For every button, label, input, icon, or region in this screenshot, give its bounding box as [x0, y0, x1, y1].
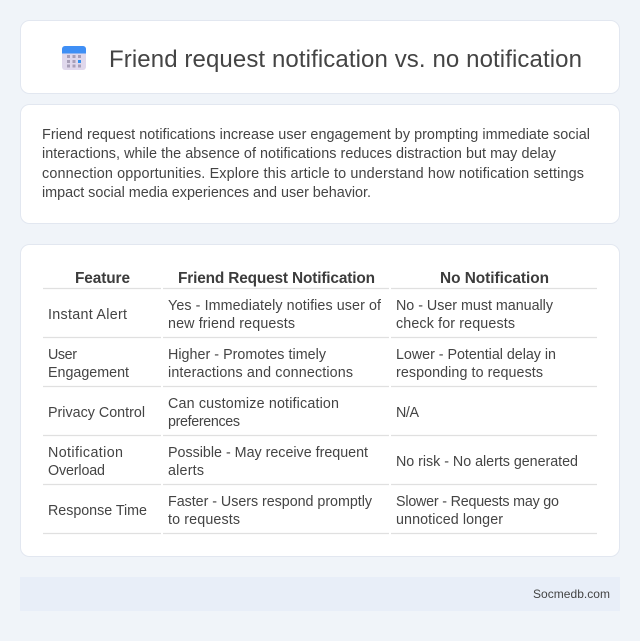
footer: Socmedb.com	[533, 587, 610, 601]
row: notification overload: No risk - No alerts generated	[396, 454, 578, 470]
row: response time: to requests	[168, 512, 240, 528]
row: response time: Faster - Users respond promptly	[168, 494, 373, 510]
row: notification overload: Overload	[48, 463, 105, 479]
text block: introduction	[42, 127, 590, 201]
text block: introduction: impact social media experiences and user behavior.	[42, 185, 371, 201]
panel: title card	[20, 20, 620, 94]
panel: comparison table	[20, 244, 620, 556]
row: privacy control: Privacy Control	[48, 405, 145, 421]
title: Friend request notification vs. no notification	[109, 46, 582, 73]
panel: introduction	[20, 104, 620, 224]
row: user engagement: responding to requests	[396, 365, 543, 381]
row: instant alert: check for requests	[396, 316, 515, 332]
row: instant alert	[48, 298, 554, 332]
row: privacy control: Can customize notification	[168, 396, 339, 412]
row: instant alert: Instant Alert	[48, 307, 127, 323]
row: user engagement: Engagement	[48, 365, 129, 381]
table header: No Notification	[440, 270, 549, 287]
row: user engagement: Lower - Potential delay in	[396, 347, 556, 363]
text block: introduction: Friend request notifications increase user engagement by prompting immediate social	[42, 127, 590, 143]
row: instant alert: new friend requests	[168, 316, 295, 332]
row: notification overload: alerts	[168, 463, 204, 479]
icon: calendar	[62, 46, 86, 70]
table header: Feature	[75, 270, 130, 287]
footer	[20, 577, 620, 611]
row: instant alert: Yes - Immediately notifies user of	[168, 298, 381, 314]
row: user engagement	[48, 347, 556, 381]
row: notification overload	[48, 445, 578, 479]
row: response time	[48, 494, 559, 528]
row: notification overload: Possible - May receive frequent	[168, 445, 368, 461]
row: response time: Response Time	[48, 503, 147, 519]
row: response time: Slower - Requests may go	[396, 494, 559, 510]
text block: introduction: connection opportunities. Explore this article to understand how notification settings	[42, 166, 584, 182]
table header: Friend Request Notification	[178, 270, 375, 287]
row: response time: unnoticed longer	[396, 512, 503, 528]
row: privacy control: N/A	[396, 405, 419, 421]
row: privacy control: preferences	[168, 414, 240, 430]
table header	[75, 270, 549, 287]
row: user engagement: User	[48, 347, 77, 363]
row: notification overload: Notification	[48, 445, 123, 461]
row: user engagement: interactions and connections	[168, 365, 353, 381]
row: privacy control	[48, 396, 419, 430]
text block: introduction: interactions, while the absence of notifications reduces distraction but may delay	[42, 146, 557, 162]
row: instant alert: No - User must manually	[396, 298, 554, 314]
row: user engagement: Higher - Promotes timely	[168, 347, 327, 363]
